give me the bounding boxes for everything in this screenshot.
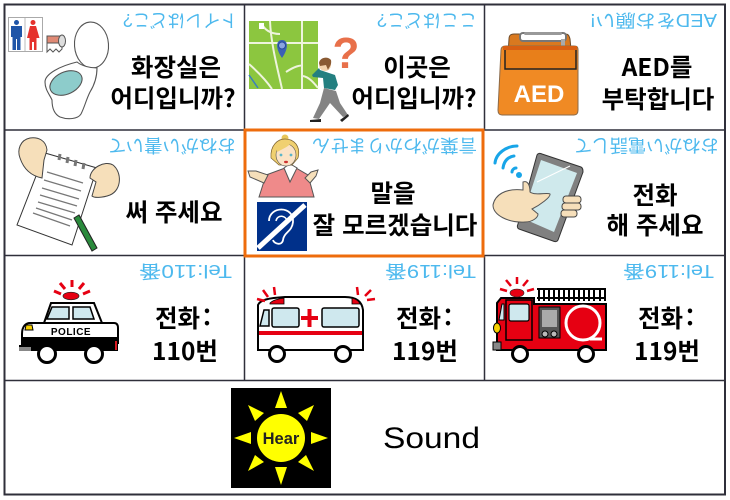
label: call 119: 119번 (392, 333, 458, 368)
label: please call (606, 177, 704, 242)
icon: map (249, 21, 318, 89)
label: please bring an AED: 부탁합니다 (602, 81, 715, 116)
label: call 119 (634, 300, 700, 368)
panel: ambulance (257, 261, 476, 368)
label: please write: 써 주세요 (125, 194, 223, 229)
icon: tablet and hand (493, 153, 583, 242)
label: where is the restroom: 어디입니까? (110, 80, 236, 115)
caption: upside-down Japanese: おねがい書いて (108, 135, 236, 155)
panel: AED request (498, 10, 717, 116)
caption: upside-down Japanese: Tel:110番 (139, 261, 232, 281)
label: call 110: 전화: (155, 300, 211, 335)
label: call 119 (392, 300, 458, 368)
caption: upside-down Japanese: AEDをお願い! (590, 10, 717, 30)
label: I do not understand well: 잘 모르겠습니다 (313, 207, 478, 242)
label: call 119: 119번 (634, 333, 700, 368)
label: please call: 해 주세요 (606, 207, 704, 242)
label: where is the restroom: 화장실은 (131, 49, 221, 84)
label: where is the restroom (110, 49, 236, 115)
panel: sound legend (231, 388, 480, 488)
icon: police car (19, 280, 118, 362)
panel: write please (17, 135, 236, 251)
icon: notepad in hands (17, 138, 119, 251)
caption: upside-down Japanese: Tel:119番 (623, 261, 714, 281)
icon: ambulance (257, 287, 375, 362)
icon: police car: POLICE (51, 327, 91, 338)
panel: restroom question (8, 10, 238, 119)
icon: hear sun symbol: Hear (263, 430, 300, 448)
icon: AED bag (498, 32, 578, 115)
icon: toilet (45, 21, 110, 119)
label: where is this: 어디입니까? (351, 80, 477, 115)
label: call 119: 전화: (396, 300, 452, 335)
icon: confused woman (248, 134, 318, 197)
caption: upside-down Japanese: トイレはどこ? (123, 10, 238, 30)
icon: person walking (310, 58, 349, 122)
caption: upside-down Japanese: 言葉がわかりません (312, 135, 477, 155)
icon: toilet paper (47, 35, 66, 52)
label: please bring an AED: AED를 (621, 49, 692, 84)
label: where is this (351, 49, 477, 115)
icon: restroom sign (8, 18, 42, 52)
panel: location question (249, 10, 477, 122)
icon: hear sun symbol (231, 388, 331, 488)
orange highlight frame (245, 130, 483, 256)
label: where is this: 이곳은 (383, 49, 451, 84)
icon: hearing loop sign (257, 202, 307, 251)
label: I do not understand well: 말을 (370, 175, 416, 210)
panel: fire engine (493, 261, 714, 368)
caption: upside-down Japanese: おねがい電話して (574, 135, 719, 155)
panel: hearing difficulty highlighted (245, 130, 483, 256)
label: sound: Sound (383, 422, 480, 455)
panel: police (19, 261, 232, 368)
icon: question mark: ? (333, 29, 359, 78)
label: call 110 (152, 300, 218, 368)
label: please call: 전화 (632, 177, 678, 212)
caption: upside-down Japanese: ここはどこ? (377, 10, 477, 30)
caption: upside-down Japanese: Tel:119番 (385, 261, 476, 281)
label: I do not understand well (313, 175, 478, 242)
icon: wifi waves (495, 146, 520, 176)
label: call 110: 110번 (152, 333, 218, 368)
icon: AED bag: AED (514, 81, 564, 108)
label: please bring an AED (602, 49, 715, 116)
icon: fire engine (493, 277, 606, 362)
panel: phone call request (493, 135, 719, 242)
label: call 119: 전화: (638, 300, 694, 335)
